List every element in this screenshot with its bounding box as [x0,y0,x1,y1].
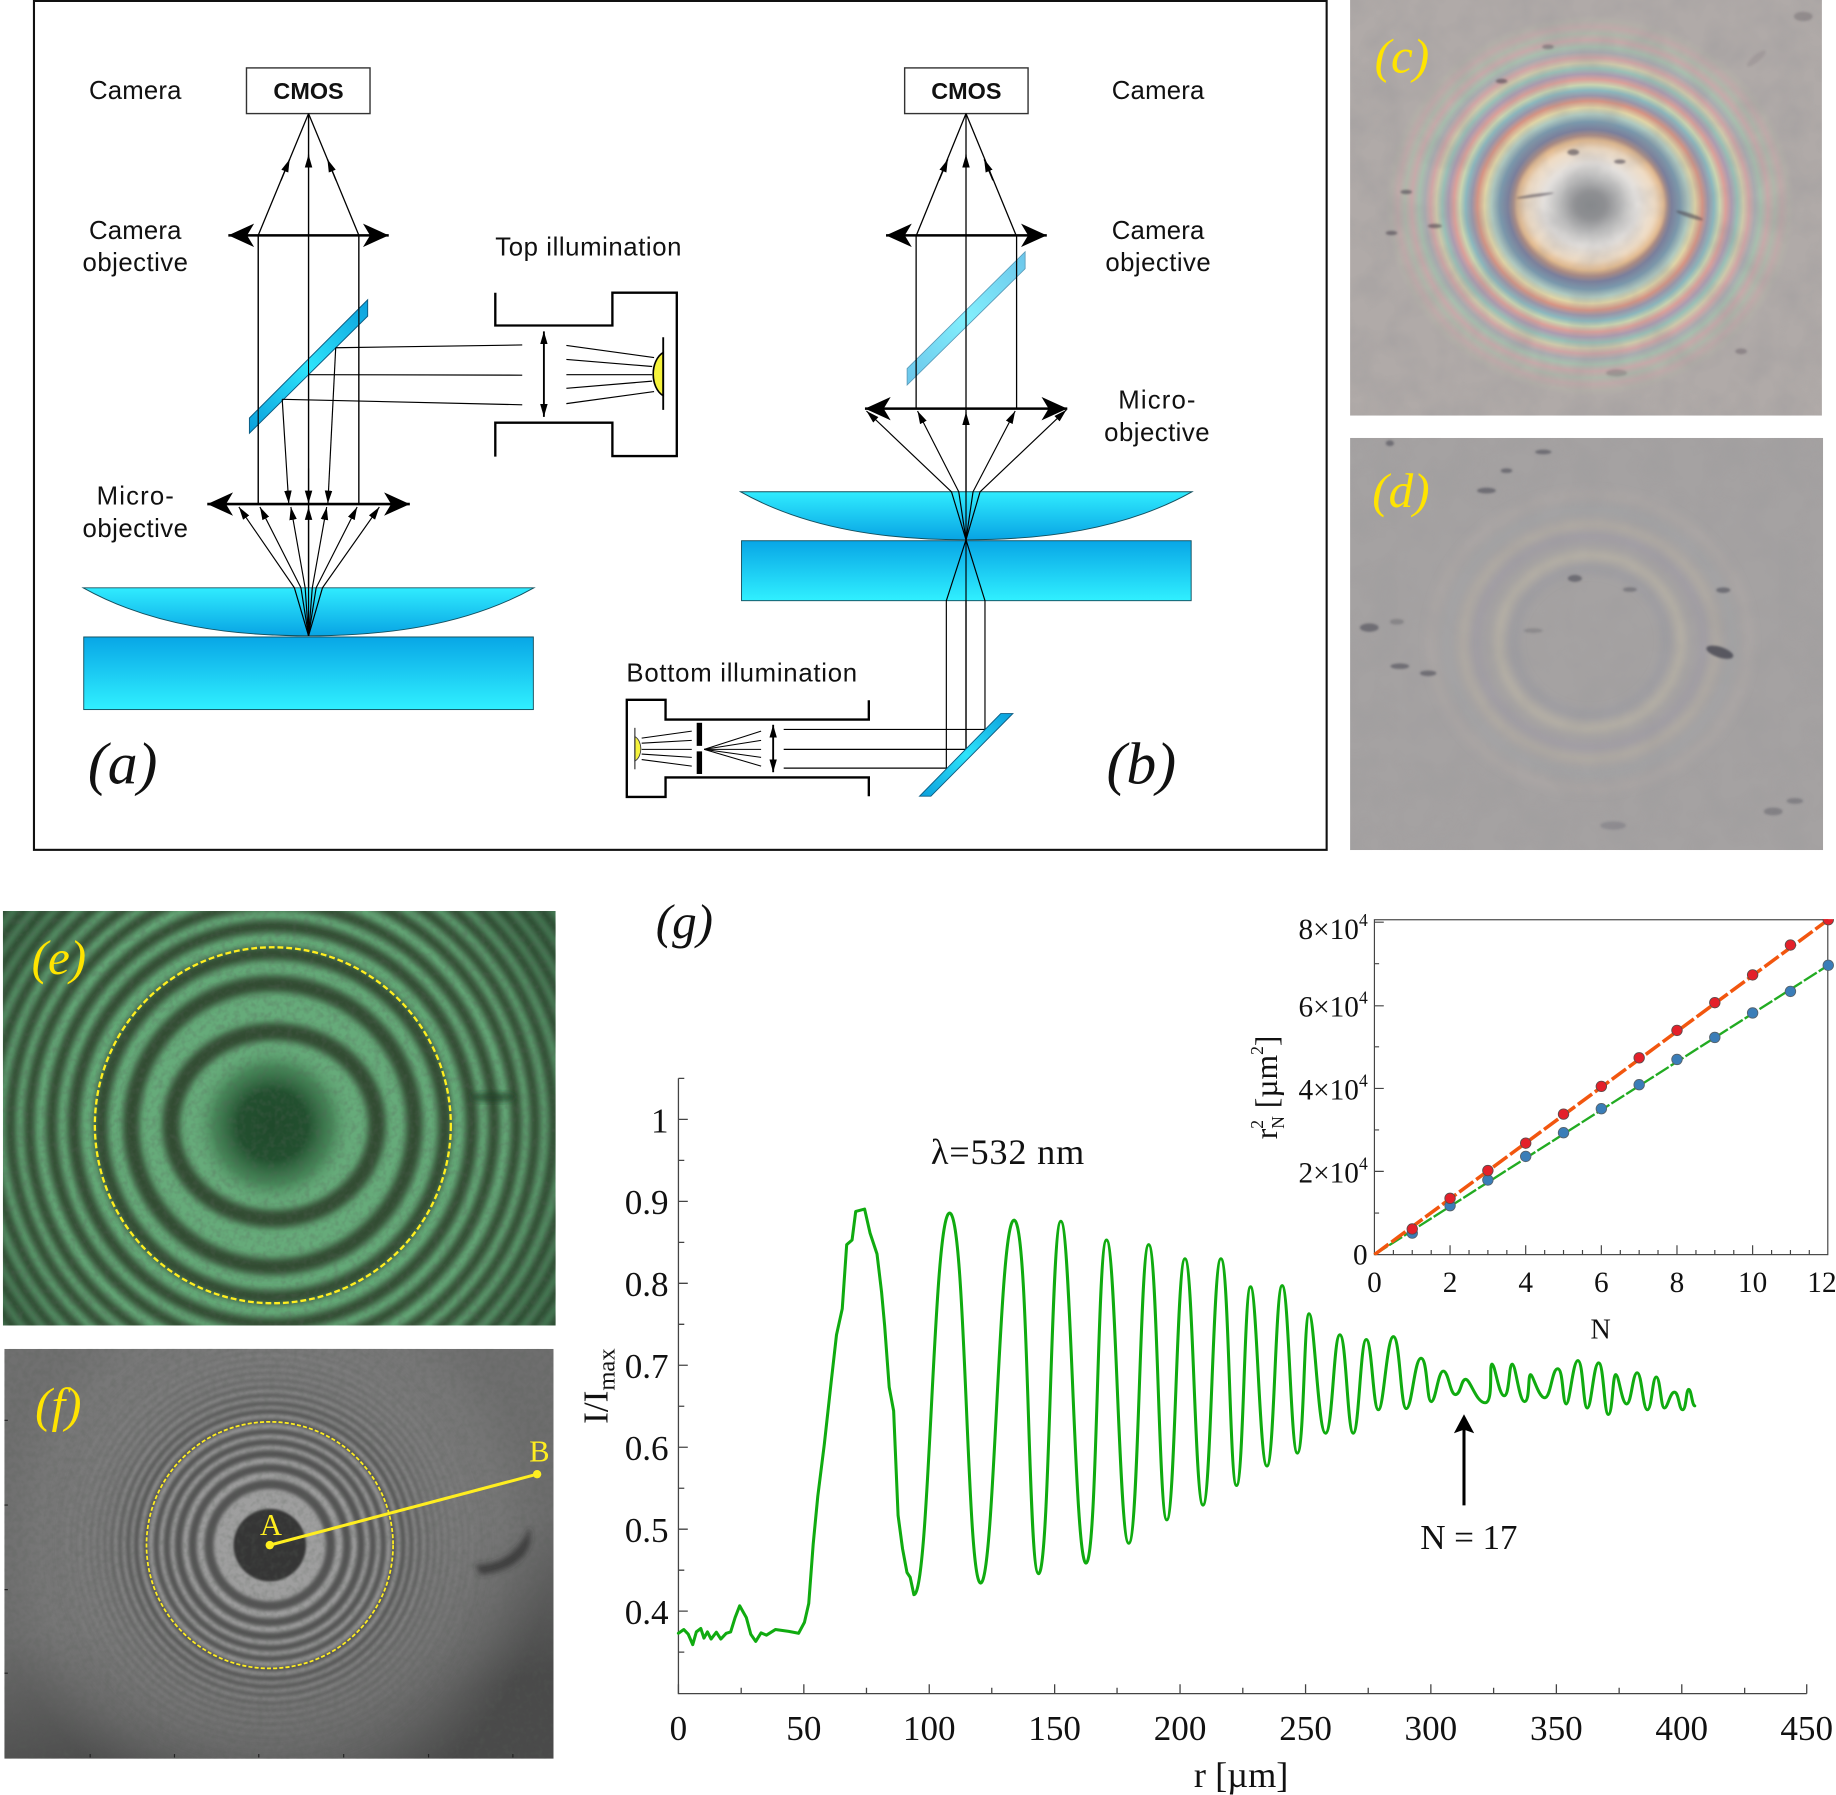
label: N = 17: N = 17 [1420,1518,1518,1557]
label: Micro-objective: objective [1104,419,1210,447]
profile line A to B: B [529,1434,550,1468]
panel: optical schemes (a) and (b) [34,1,1327,850]
mottled surface [1350,438,1823,850]
inset x tick labels: 4 [1518,1267,1533,1299]
dark central disc [233,1509,306,1581]
smudge [475,1527,531,1575]
rays: camera to micro-objective [916,114,1017,749]
y axis title: I/I [577,1391,616,1424]
inset y tick labels: 6×10 [1299,991,1359,1023]
y axis tick labels: 0.4 [625,1593,669,1632]
beam splitter [249,300,368,433]
label: (d): (d) [1372,463,1430,518]
rays: camera to objective [258,114,359,636]
x axis tick labels: 200 [1154,1709,1206,1748]
plano-convex lens [741,492,1192,540]
bright central zone [1515,136,1667,269]
scheme (b): bottom illumination microscope [626,68,1211,797]
label: Bottom illumination: Bottom illumination [626,659,857,687]
x axis tick labels: 300 [1405,1709,1457,1748]
inset x tick labels: 2 [1443,1267,1457,1299]
inset y tick labels: 4 [1359,910,1368,930]
wavelength annotation: λ=532 nm [931,1132,1084,1172]
surface specks [1360,440,1803,830]
inset y tick labels: 4 [1359,1071,1368,1091]
surface texture [3,911,556,1325]
y axis tick labels: 0.8 [625,1265,669,1304]
axes and ticks [678,1078,1807,1694]
label: Micro-objective: Micro- [1118,387,1196,415]
faint rings [1464,551,1716,732]
smudge [470,1092,516,1102]
faded beam splitter [907,252,1025,385]
dashed circle [95,947,451,1303]
label: Camera: Camera [1112,77,1205,105]
rays: splitter [258,114,522,636]
inset x tick labels: 6 [1594,1267,1609,1299]
collimating lens arrow [772,725,774,772]
arrow to N = 17 [1454,1414,1474,1505]
x axis tick labels: 100 [903,1709,956,1748]
inset y tick labels: 8×10 [1299,914,1359,946]
bottom illumination housing [627,700,869,797]
label: (e): (e) [32,930,86,985]
inset x axis title: N [1590,1314,1611,1345]
glass plate [742,541,1191,601]
mirror [920,714,1013,796]
lamp [635,728,641,769]
x axis title: r [µm] [1194,1755,1288,1795]
inset y tick labels: 4 [1359,1154,1368,1174]
label: Camera objective: Camera [89,217,182,245]
inset y tick labels [1299,910,1368,1272]
rays through aperture [642,731,761,766]
inset y tick labels: 0 [1353,1240,1368,1272]
plano-convex lens [83,588,534,636]
profile line A to B [260,1434,550,1549]
label: Camera objective [83,217,188,277]
vignette [3,911,556,1325]
dark fringes [70,1349,469,1732]
mottled surface [1350,2,1784,374]
CMOS sensor box: CMOS [931,78,1001,104]
profile line A to B: A [260,1508,282,1542]
CMOS sensor box: CMOS [273,78,344,104]
CMOS sensor box [905,68,1028,114]
panel (g): intensity profile chart [577,894,1836,1795]
y axis tick labels: 0.5 [625,1511,669,1550]
y axis tick labels: 1 [651,1101,669,1140]
inset y tick labels: 4×10 [1299,1074,1359,1106]
panel (f): grayscale interference rings with profile line [4,1348,554,1759]
ray fan and beams [784,410,1066,768]
dark central spot [202,1054,344,1196]
inset x tick labels [1367,1267,1836,1299]
panel (c): white-light interference rings [1350,0,1822,416]
x axis tick labels: 450 [1780,1709,1833,1748]
top illumination housing [495,293,677,457]
lamp [653,337,663,410]
aperture [697,723,702,774]
label: (c): (c) [1375,29,1429,84]
dark fringes [2,911,556,1326]
panel (d): faint interference rings [1350,438,1823,850]
label: Camera: Camera [89,77,182,105]
x axis tick labels: 250 [1279,1709,1332,1748]
x axis tick labels: 150 [1028,1709,1081,1748]
intensity curve [678,1209,1695,1645]
surface texture [4,1349,553,1759]
label: Camera objective [1105,217,1211,277]
inset y axis title: N [1268,1116,1288,1129]
inset x tick labels: 12 [1807,1267,1836,1299]
x axis tick labels: 400 [1655,1709,1708,1748]
label: (b): (b) [1107,730,1176,796]
inset chart: r squared vs N [1247,910,1836,1345]
inset frame and ticks [1374,920,1828,1255]
camera objective lens symbol [228,234,389,236]
inset y tick labels: 4 [1359,987,1368,1007]
x axis tick labels: 350 [1530,1709,1583,1748]
label: Top illumination: Top illumination [495,233,681,261]
inset y axis title: 2 [1247,1046,1267,1055]
inset y tick labels: 2×10 [1299,1158,1359,1190]
camera objective lens symbol [886,234,1047,236]
label: Camera objective: Camera [1112,217,1205,245]
glass plate [84,637,533,710]
x axis tick labels: 0 [670,1709,687,1748]
inset y axis title: 2 [1247,1120,1267,1129]
rays from lamp [566,345,654,404]
y axis tick labels: 0.9 [625,1183,669,1222]
label: (a): (a) [88,730,157,796]
blue data points [1407,960,1834,1238]
fringe zone glow [34,1348,516,1759]
inset y axis title: ] [1249,1036,1284,1046]
label: Micro-objective: Micro- [97,483,174,511]
ray fan [239,507,379,636]
label: (f): (f) [35,1377,82,1432]
x axis tick labels [670,1709,1833,1748]
inset fit lines and data [1374,914,1834,1255]
CMOS sensor box [246,68,370,114]
y axis tick labels: 0.7 [625,1347,669,1386]
red data points [1407,914,1834,1234]
dashed circle [146,1422,393,1668]
x axis tick labels: 50 [786,1709,821,1748]
frame ticks [4,1420,513,1758]
y axis tick labels [625,1101,669,1632]
panel (e): green monochromatic interference rings [2,911,556,1326]
label: Camera objective: objective [83,249,188,277]
y axis tick labels: 0.6 [625,1429,669,1468]
inset x tick labels: 8 [1670,1267,1684,1299]
inset x tick labels: 10 [1738,1267,1767,1299]
micro-objective lens symbol [207,503,410,505]
surface specks [1386,12,1813,376]
label: Camera objective: objective [1105,249,1211,277]
label: (g): (g) [656,894,713,949]
inset y axis title: [µm [1249,1054,1284,1116]
label: Micro-objective [83,483,188,543]
inset y axis title: r [1249,1129,1284,1139]
label: Micro-objective [1104,387,1210,447]
micro-objective lens symbol [865,408,1067,410]
label: Micro-objective: objective [83,515,188,543]
y axis title: max [594,1348,621,1391]
inset x tick labels: 0 [1367,1267,1382,1299]
scheme (a): top illumination microscope [83,68,681,796]
collimating lens arrow [543,331,545,417]
